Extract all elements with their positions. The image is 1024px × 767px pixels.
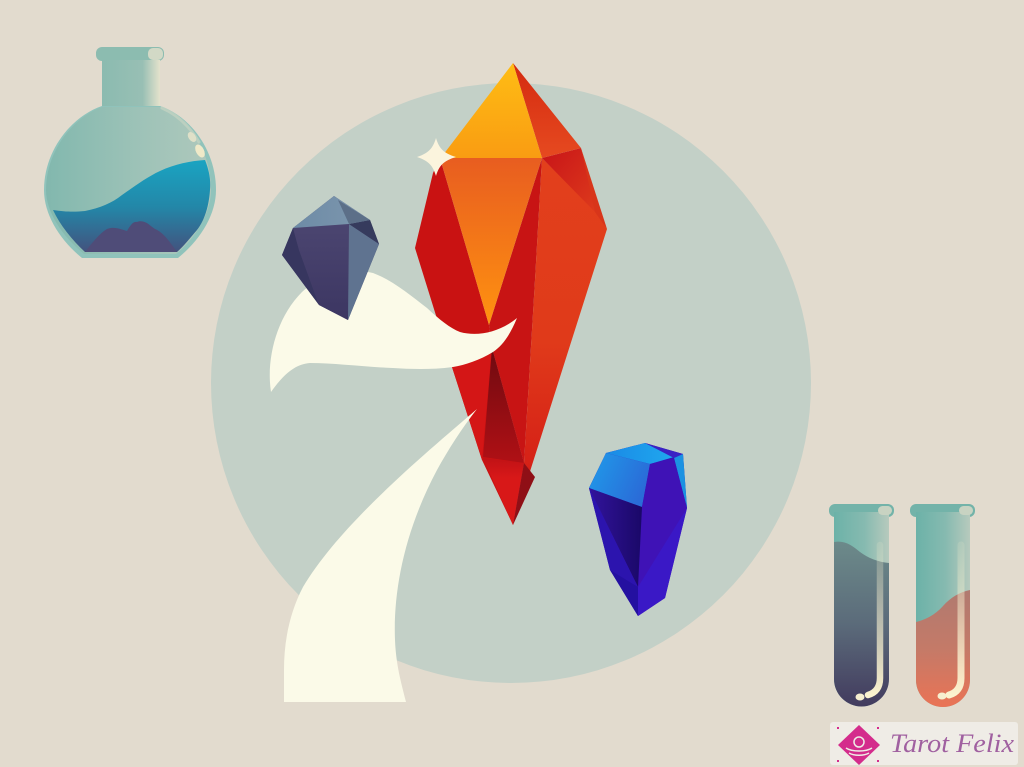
flask body outer rim	[44, 106, 216, 258]
flask sediment	[85, 221, 177, 252]
logo wordmark: Tarot Felix	[890, 729, 1014, 758]
facet: left body	[415, 158, 524, 525]
flask glass	[46, 107, 211, 254]
lower cream swoosh	[284, 409, 477, 702]
dark liquid	[834, 542, 889, 706]
facet: upper right	[542, 148, 596, 212]
facet: right body	[513, 158, 607, 525]
red liquid	[916, 590, 970, 707]
test tube: red liquid	[910, 504, 975, 707]
flask glare	[162, 108, 199, 142]
flask lip	[96, 47, 164, 61]
test tube: dark liquid	[829, 504, 894, 706]
background circle	[211, 83, 811, 683]
flask glare spots	[186, 130, 198, 144]
logo badge	[830, 722, 1018, 765]
facet: bottom right dark	[513, 463, 535, 525]
round flask	[44, 47, 216, 258]
upper cream swoosh	[270, 271, 517, 392]
facet: top right	[513, 63, 581, 158]
facet: bottom tip	[483, 458, 524, 525]
tube highlight	[868, 545, 880, 695]
facet: lower left	[452, 345, 492, 460]
red crystal	[415, 63, 607, 525]
tube highlight	[949, 545, 961, 695]
dark grey gem	[282, 196, 379, 320]
flask water	[53, 160, 210, 252]
facet: orange V	[440, 158, 542, 325]
flask neck	[102, 60, 160, 108]
blue gem	[589, 443, 687, 616]
facet: dark inner	[483, 348, 524, 463]
four-point star sparkle	[417, 138, 456, 176]
facet: yellow top	[440, 63, 542, 158]
facet: center red	[489, 158, 542, 463]
logo diamond icon	[837, 725, 880, 765]
